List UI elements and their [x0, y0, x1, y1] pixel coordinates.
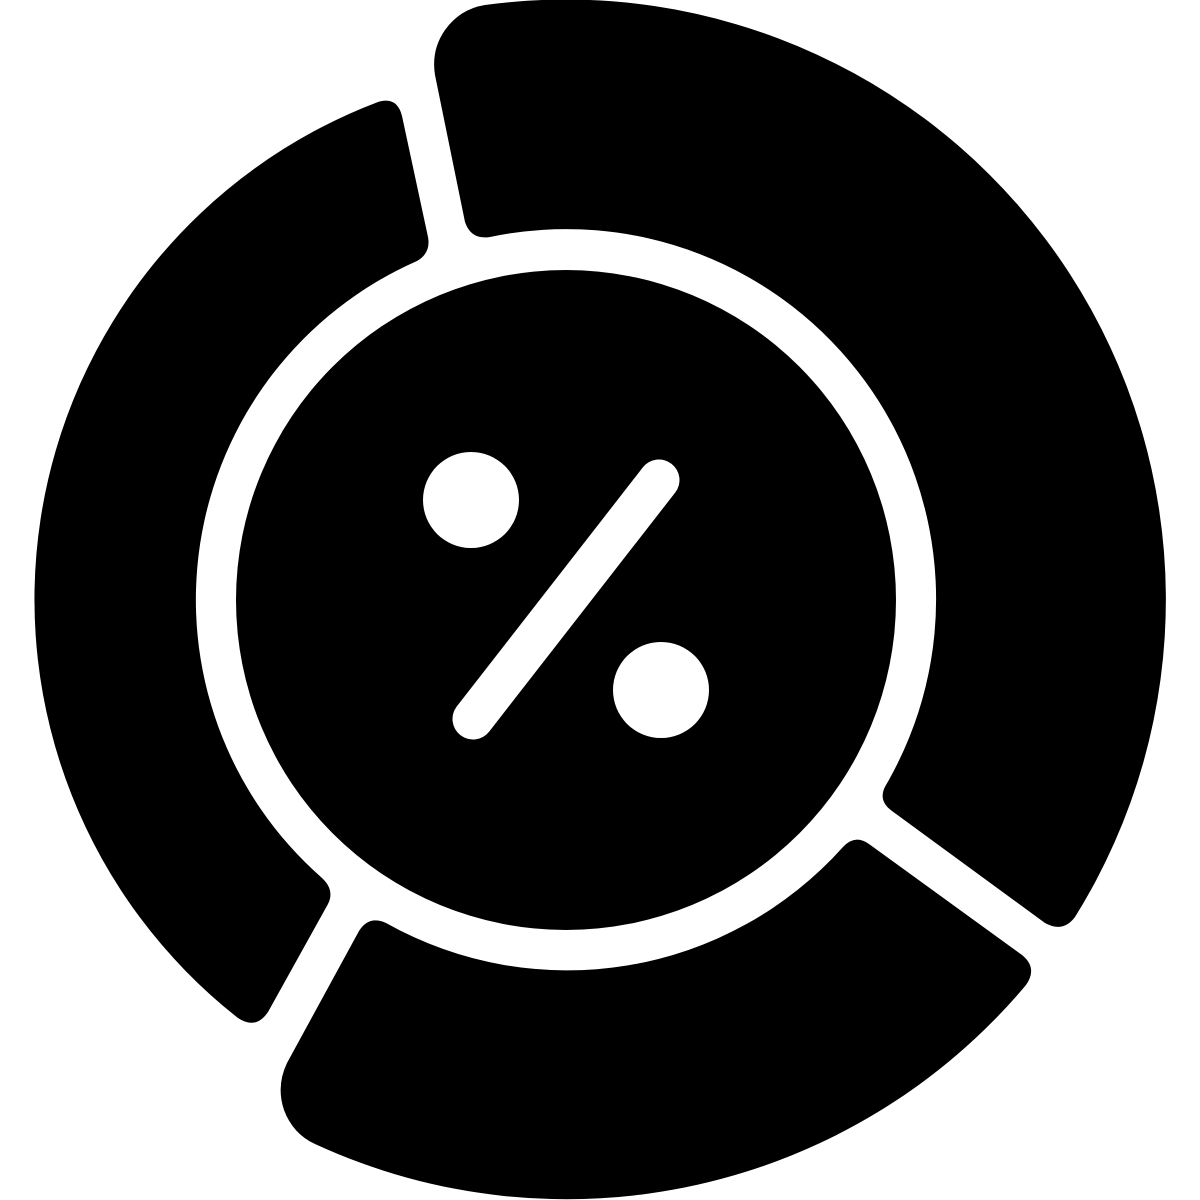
segment: top right ring: [434, 0, 1166, 927]
segment: left ring: [34, 101, 429, 1023]
percent slash: [473, 480, 659, 719]
percent lower dot: [613, 642, 709, 738]
center disc: [236, 270, 896, 930]
segment: bottom ring: [281, 840, 1031, 1199]
percent upper dot: [423, 452, 519, 548]
percent sign: [423, 452, 709, 738]
